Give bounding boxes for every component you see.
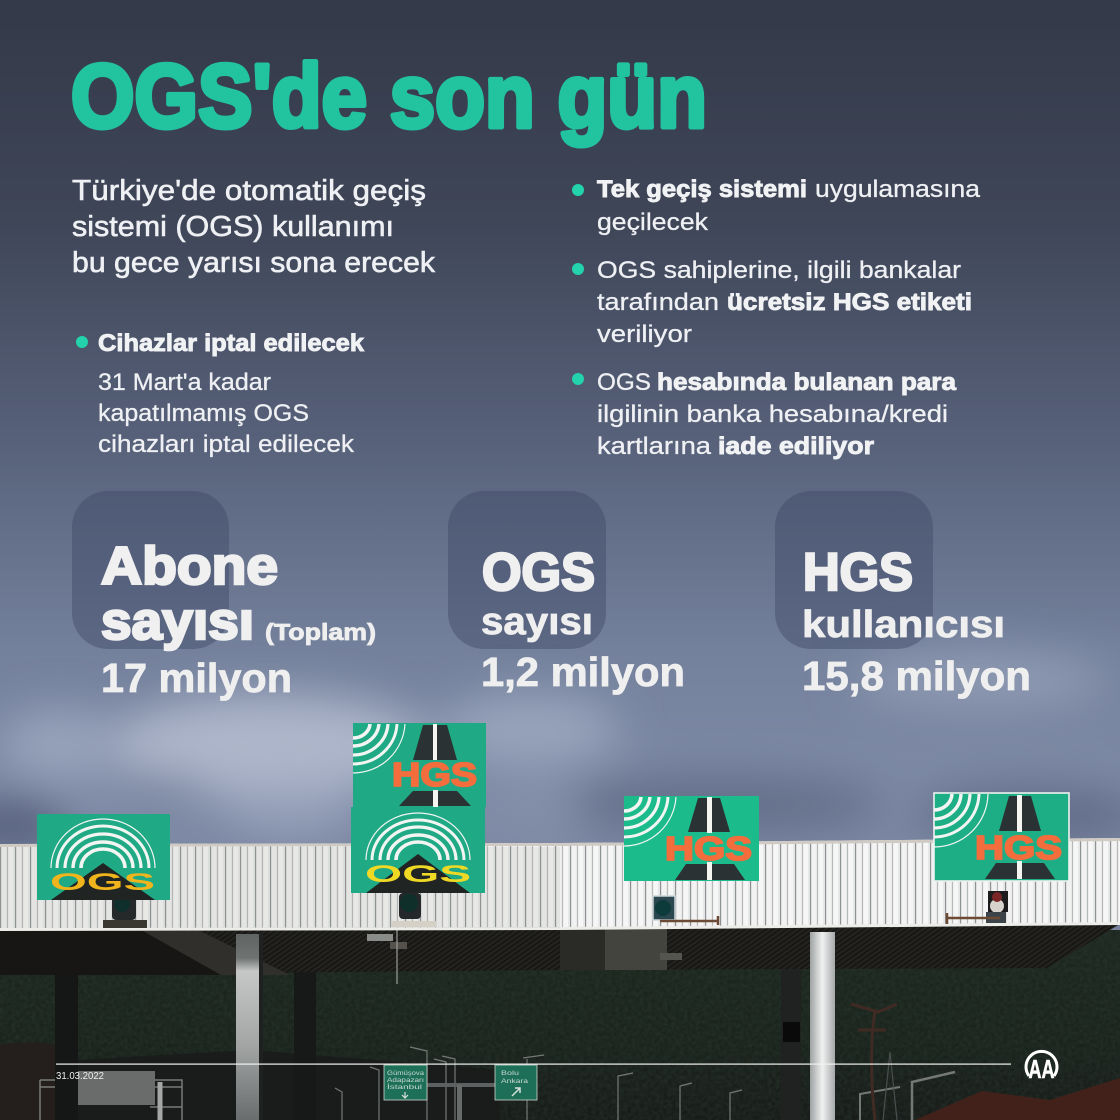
toll canopy underside (0, 924, 1120, 984)
bullet: tek geçiş sistemi: Tek geçiş sistemi (597, 176, 807, 203)
bullet: cihazlar iptal edilecek (76, 330, 365, 458)
bullet: tek geçiş sistemi: uygulamasına (815, 176, 981, 203)
HGS toll sign, stacked top: HGS (392, 756, 477, 793)
green road sign: Gümüşova Adapazarı İstanbul: Gümüşova (387, 1070, 424, 1077)
logo: Anadolu Agency (1026, 1051, 1057, 1084)
bullet: hesaptaki para iadesi: OGS (597, 369, 651, 396)
bullet: hesaptaki para iadesi: ilgilinin banka hesabına/kredi (597, 401, 948, 428)
HGS toll sign, centre (624, 796, 759, 881)
stat: OGS sayısı (448, 491, 685, 695)
stat: abone sayısı: 17 milyon (101, 655, 292, 701)
green road sign: Gümüşova Adapazarı İstanbul (384, 1065, 427, 1100)
title: OGS'de son gün (71, 47, 707, 147)
OGS toll sign, stacked bottom (351, 807, 485, 893)
traffic signals (103, 891, 1008, 928)
intro text block: sistemi (OGS) kullanımı (72, 211, 394, 243)
bullet: cihazlar iptal edilecek: cihazları iptal edilecek (98, 431, 355, 458)
stat: HGS kullanıcısı: HGS (803, 543, 913, 602)
HGS toll sign, right (934, 793, 1069, 881)
red tiled roof (915, 1078, 1120, 1120)
stat: OGS sayısı: 1,2 milyon (481, 649, 685, 695)
bullet: ücretsiz HGS etiketi: OGS sahiplerine, ilgili bankalar (597, 257, 961, 284)
bullet: ücretsiz HGS etiketi: veriliyor (597, 321, 692, 348)
bullet: hesaptaki para iadesi: hesabında bulanan para (657, 369, 957, 396)
HGS toll sign, centre: HGS (665, 830, 752, 867)
stat: abone sayısı: sayısı (101, 592, 254, 651)
stat: HGS kullanıcısı: kullanıcısı (802, 604, 1005, 646)
stat: abone sayısı: Abone (101, 537, 278, 596)
bullet: cihazlar iptal edilecek: Cihazlar iptal edilecek (98, 330, 365, 357)
stat: abone sayısı: (Toplam) (265, 619, 376, 645)
background: forest (0, 930, 1120, 1120)
green road sign: Bolu Ankara: Ankara (501, 1078, 528, 1085)
OGS toll sign, left: OGS (50, 869, 155, 896)
stat: OGS sayısı: sayısı (481, 601, 593, 643)
OGS toll sign, left (37, 814, 170, 900)
OGS toll sign, stacked bottom: OGS (365, 861, 471, 888)
green road sign: Bolu Ankara: Bolu (501, 1070, 520, 1077)
HGS toll sign, stacked top (353, 723, 486, 807)
bullet: ücretsiz HGS etiketi: ücretsiz HGS etiketi (727, 289, 972, 316)
stat: HGS kullanıcısı (775, 491, 1031, 699)
rear dark columns (55, 960, 801, 1120)
logo: Anadolu Agency: AA (1028, 1054, 1055, 1084)
bullet: cihazlar iptal edilecek: kapatılmamış OGS (98, 400, 309, 427)
corrugated toll gate wall (0, 838, 1120, 931)
green road sign: Bolu Ankara (495, 1065, 537, 1100)
bullet: cihazlar iptal edilecek: 31 Mart'a kadar (98, 369, 271, 396)
stat: OGS sayısı: OGS (482, 543, 595, 602)
footer rule and date: 31.03.2022 (56, 1070, 104, 1082)
bullet: ücretsiz HGS etiketi: tarafından (597, 289, 719, 316)
intro text block (72, 175, 436, 279)
stat: abone sayısı (72, 491, 376, 701)
distant road signs and lamp posts (40, 1047, 955, 1120)
silver front columns (236, 932, 835, 1120)
green road sign: Gümüşova Adapazarı İstanbul: İstanbul (387, 1082, 423, 1091)
bullet: ücretsiz HGS etiketi (572, 257, 972, 348)
intro text block: Türkiye'de otomatik geçiş (72, 175, 426, 207)
HGS toll sign, right: HGS (975, 829, 1062, 866)
bullet: tek geçiş sistemi (572, 176, 981, 236)
green road sign: Gümüşova Adapazarı İstanbul: Adapazarı (387, 1077, 424, 1084)
utility pole (851, 1004, 897, 1120)
stat: HGS kullanıcısı: 15,8 milyon (802, 653, 1031, 699)
bullet: hesaptaki para iadesi: iade ediliyor (718, 433, 874, 460)
bullet: hesaptaki para iadesi: kartlarına (597, 433, 712, 460)
bullet: tek geçiş sistemi: geçilecek (597, 209, 709, 236)
bullet: hesaptaki para iadesi (572, 369, 957, 460)
intro text block: bu gece yarısı sona erecek (72, 247, 436, 279)
